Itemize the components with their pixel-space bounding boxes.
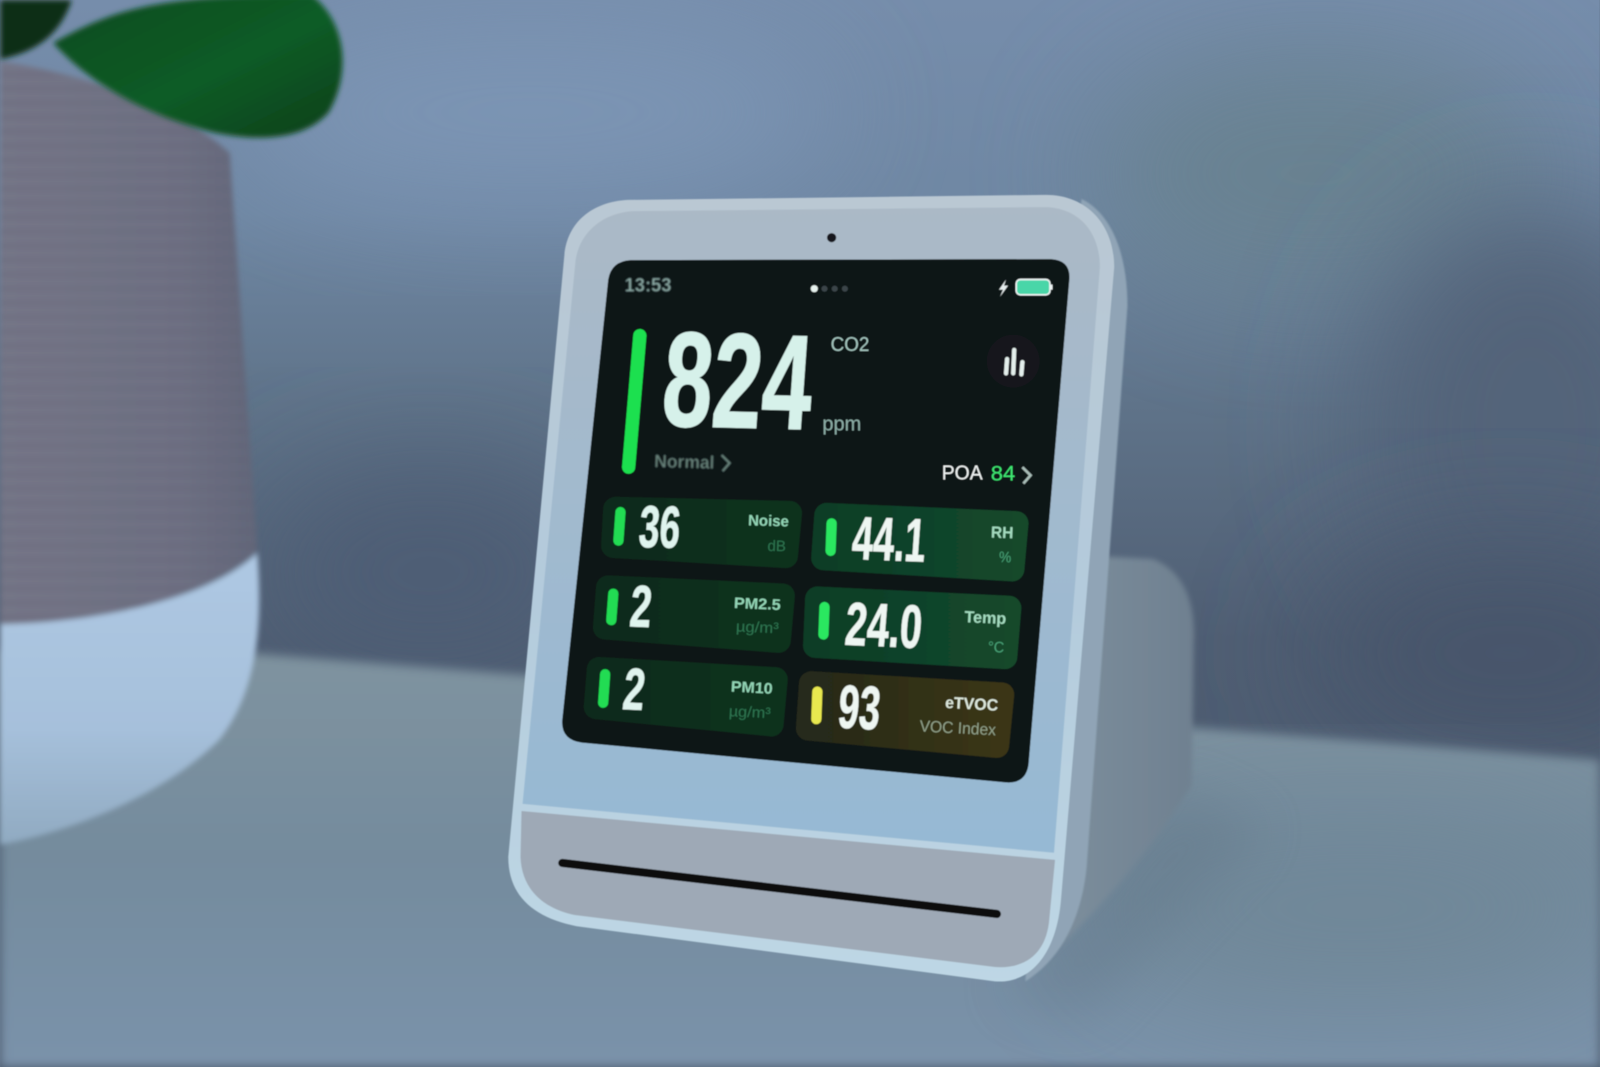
card: PM10: 2 [620, 655, 649, 723]
plant leaves [0, 0, 342, 138]
chart button [987, 335, 1040, 388]
card: RH [823, 504, 1016, 575]
card: eTVOC [808, 673, 1002, 746]
card: PM2.5: PM2.5 [734, 595, 782, 614]
card: Temp [815, 590, 1009, 661]
CO2 level bar [629, 336, 640, 467]
POA score: POA [942, 462, 983, 484]
icon: battery [1016, 280, 1052, 295]
outer shell [508, 195, 1114, 982]
card: eTVOC: eTVOC [945, 694, 999, 715]
POA score: 84 [991, 461, 1015, 485]
card: PM2.5: µg/m³ [736, 618, 779, 637]
speaker grille panel [520, 811, 1055, 967]
icon: charging bolt [999, 280, 1008, 297]
front face [523, 207, 1100, 853]
card: PM10 [596, 655, 776, 724]
card: Temp: Temp [964, 608, 1007, 628]
CO2 label: CO2 [831, 334, 869, 356]
status bar [625, 275, 1052, 297]
card: PM2.5 [605, 572, 783, 641]
card: RH: RH [991, 524, 1014, 542]
clock: 13:53 [625, 275, 672, 297]
POA score [942, 461, 1031, 485]
card: Temp: °C [988, 639, 1005, 657]
status: Normal [654, 450, 715, 473]
page dots [811, 285, 848, 292]
card: RH: 44.1 [850, 504, 928, 575]
device stand behind the monitor [1051, 556, 1194, 954]
card: eTVOC: 93 [836, 673, 883, 742]
card: Noise [613, 493, 790, 561]
card: Noise: dB [767, 538, 786, 555]
CO2 main reading [629, 304, 869, 473]
card: PM2.5: 2 [627, 572, 655, 640]
card: Noise: Noise [748, 512, 789, 530]
CO2 value: 824 [658, 304, 818, 458]
card: Temp: 24.0 [843, 590, 925, 661]
camera [827, 233, 836, 242]
unit: ppm [822, 413, 861, 435]
display screen [562, 259, 1069, 783]
air quality monitor device [508, 195, 1127, 982]
card: RH: % [999, 549, 1012, 566]
card: Noise: 36 [637, 493, 683, 561]
vent slot [562, 863, 997, 914]
right side edge [1025, 199, 1127, 981]
plant pot with saucer [0, 61, 259, 845]
card: eTVOC: VOC Index [919, 717, 996, 739]
card: PM10: µg/m³ [728, 703, 771, 722]
card: PM10: PM10 [730, 679, 773, 698]
